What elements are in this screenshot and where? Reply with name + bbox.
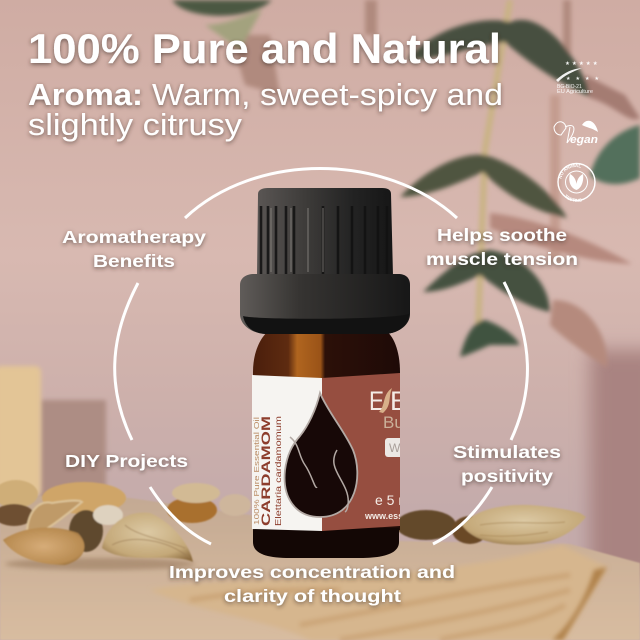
drop logo [285, 393, 357, 517]
certification icon: no animal testing: NO ANIMAL [559, 164, 581, 179]
cardamom pods left [0, 480, 251, 565]
wooden table surface [0, 495, 640, 640]
cap ridges [261, 206, 387, 274]
benefit: aromatherapy [62, 227, 206, 271]
aroma description: slightly citrusy [28, 108, 243, 142]
benefit: muscle tension: muscle tension [426, 249, 578, 269]
blurred eucalyptus plant [172, 0, 640, 368]
bottle base [253, 528, 399, 558]
benefit: muscle tension [426, 225, 578, 269]
circle arc right [504, 282, 527, 440]
aroma description: Warm, sweet-spicy and [152, 78, 503, 112]
aroma description [28, 78, 503, 142]
benefit: stimulates positivity [453, 442, 561, 486]
bottle glass [253, 330, 400, 530]
benefit: concentration: clarity of thought [224, 586, 401, 606]
label: Elettaria cardamomum [273, 416, 283, 526]
certification icon: EU organic: ★★★★★ [565, 60, 600, 67]
circle arc bottom left [150, 487, 211, 544]
label: Bulg [383, 413, 417, 432]
certification icon: EU organic: ★★★★ [566, 76, 604, 82]
cardamom pods right [396, 505, 586, 545]
circle arc left [115, 283, 138, 440]
label: e 5 ml [375, 492, 413, 508]
label text: 100% Pure Essential Oil [254, 416, 261, 525]
circle arc bottom right [433, 487, 492, 544]
certification icon: EU organic: EU Agriculture [557, 89, 593, 95]
benefit: muscle tension: Helps soothe [437, 225, 567, 245]
benefit: stimulates positivity: positivity [461, 466, 553, 486]
label: Wo [389, 441, 407, 455]
circle arc top [185, 168, 457, 218]
benefit: aromatherapy: Benefits [93, 251, 175, 271]
collar lower rim [243, 314, 409, 334]
cap [257, 188, 393, 276]
label: www.essenti [364, 511, 419, 521]
title: 100% Pure and Natural [28, 25, 501, 72]
label [252, 373, 400, 531]
certification icon: no animal testing [557, 162, 596, 202]
benefit: DIY projects: DIY Projects [65, 451, 188, 471]
certification icon: no animal testing: TESTING [565, 194, 582, 202]
benefit: stimulates positivity: Stimulates [453, 442, 561, 462]
benefit: concentration [169, 562, 455, 606]
certification icon: vegan: egan [570, 134, 598, 146]
label: E [390, 386, 408, 416]
benefit: concentration: Improves concentration and [169, 562, 455, 582]
certification icon: vegan [554, 121, 598, 146]
product bottle [240, 188, 419, 558]
collar [240, 274, 410, 334]
brand text: E [369, 386, 384, 416]
aroma description: Aroma: [28, 78, 143, 112]
certification icon: EU organic [556, 60, 604, 95]
benefit: aromatherapy: Aromatherapy [62, 227, 206, 247]
label: CARDAMOM [261, 416, 273, 526]
certification icon: EU organic: BG-BIO-21 [557, 84, 582, 90]
